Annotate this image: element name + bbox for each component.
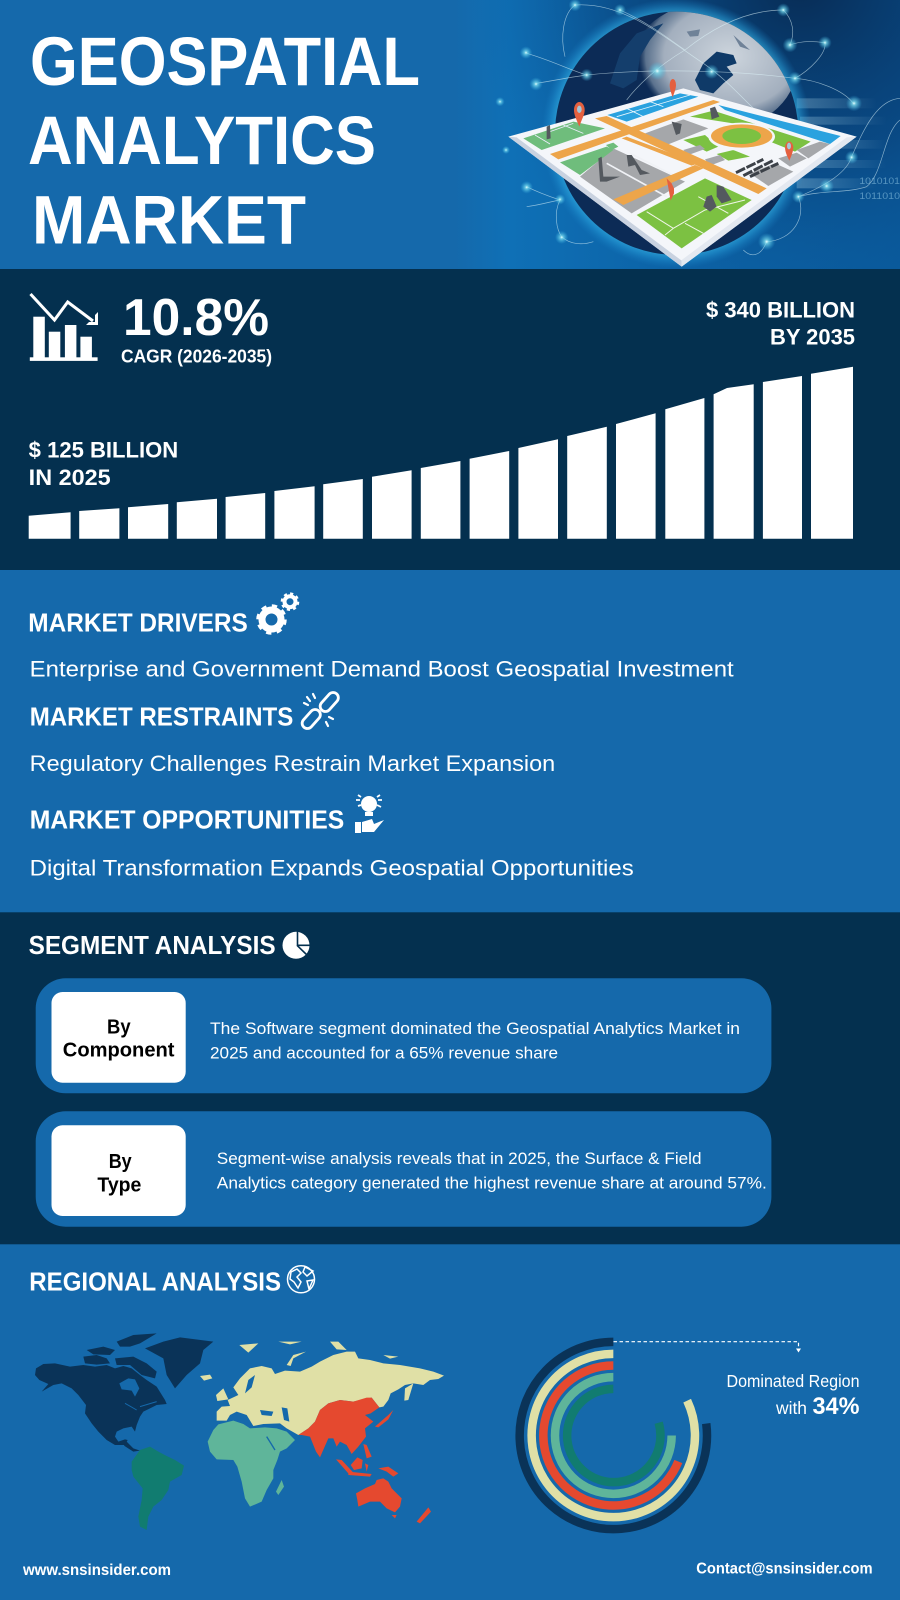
donut chart bbox=[520, 1342, 707, 1529]
text: component finding: 2025 and accounted for a 65% revenue share bbox=[210, 1043, 558, 1062]
heading: segment analysis: SEGMENT ANALYSIS bbox=[29, 930, 276, 960]
text: type finding bbox=[217, 1149, 767, 1192]
title bbox=[28, 23, 420, 258]
card: by type bbox=[36, 1111, 771, 1227]
text: restraint: Regulatory Challenges Restrain Market Expansion bbox=[30, 751, 555, 776]
footer: contact: Contact@snsinsider.com bbox=[696, 1560, 873, 1577]
callout: dominated region: with bbox=[775, 1398, 807, 1418]
label: by component: Component bbox=[63, 1040, 175, 1062]
callout: dominated region bbox=[726, 1371, 860, 1420]
text: component finding bbox=[210, 1019, 740, 1062]
2025 value bbox=[29, 438, 178, 490]
panel: market size stats bbox=[0, 269, 900, 570]
icon: globe bbox=[288, 1266, 314, 1293]
2035 value: BY 2035 bbox=[770, 325, 855, 350]
arrow: dashed leader bbox=[614, 1342, 801, 1352]
icon: idea in hand bbox=[355, 795, 384, 833]
world map bbox=[35, 1333, 444, 1530]
label: by type: Type bbox=[97, 1175, 141, 1197]
2035 value: $ 340 BILLION bbox=[706, 298, 855, 323]
bar chart bbox=[29, 367, 853, 539]
label: by component: By bbox=[107, 1016, 131, 1038]
heading: market drivers: MARKET DRIVERS bbox=[28, 608, 248, 638]
text: opportunity: Digital Transformation Expands Geospatial Opportunities bbox=[30, 856, 634, 881]
callout: dominated region: Dominated Region bbox=[726, 1371, 860, 1391]
card: by component bbox=[36, 978, 771, 1093]
region: South America bbox=[132, 1447, 184, 1530]
CAGR value: 10.8% bbox=[123, 289, 269, 347]
title: MARKET bbox=[32, 182, 306, 258]
binary digits: 1011010 bbox=[859, 191, 900, 201]
CAGR label: CAGR (2026-2035) bbox=[121, 347, 272, 367]
header hero illustration bbox=[455, 0, 900, 270]
title: GEOSPATIAL bbox=[30, 23, 420, 100]
text: component finding: The Software segment dominated the Geospatial Analytics Market in bbox=[210, 1019, 740, 1038]
icon: broken link bbox=[300, 690, 341, 731]
region: Asia Pacific bbox=[298, 1398, 431, 1523]
footer: website: www.snsinsider.com bbox=[22, 1562, 171, 1579]
text: type finding: Analytics category generated the highest revenue share at around 57%. bbox=[217, 1173, 767, 1192]
icon: CAGR chart bbox=[30, 294, 98, 361]
heading: market restraints: MARKET RESTRAINTS bbox=[30, 701, 293, 731]
heading: regional analysis: REGIONAL ANALYSIS bbox=[29, 1267, 281, 1297]
map sheet bbox=[508, 79, 857, 267]
binary digits bbox=[859, 176, 900, 201]
panel: market dynamics bbox=[28, 594, 734, 881]
map pins bbox=[574, 79, 793, 201]
callout: dominated region: 34% bbox=[812, 1393, 860, 1420]
text: driver: Enterprise and Government Demand Boost Geospatial Investment bbox=[30, 657, 734, 682]
machinery icons bbox=[547, 107, 732, 212]
2025 value: $ 125 BILLION bbox=[29, 438, 178, 463]
binary digits: 1010101 bbox=[859, 176, 900, 186]
panel: header bbox=[0, 0, 900, 270]
label: by type: By bbox=[109, 1151, 132, 1173]
heading: market opportunities: MARKET OPPORTUNITIES bbox=[30, 805, 344, 835]
icon: gears bbox=[258, 594, 298, 632]
panel: regional analysis bbox=[29, 1266, 860, 1530]
text: type finding: Segment-wise analysis reveals that in 2025, the Surface & Field bbox=[217, 1149, 702, 1168]
panel: segment analysis bbox=[0, 912, 900, 1244]
2035 value bbox=[706, 298, 855, 350]
2025 value: IN 2025 bbox=[29, 465, 111, 490]
region: North America bbox=[35, 1333, 213, 1452]
icon: pie chart bbox=[282, 931, 311, 959]
label: by type bbox=[52, 1125, 186, 1216]
title: ANALYTICS bbox=[28, 102, 376, 179]
label: by component bbox=[52, 992, 186, 1083]
region: Europe and Russia bbox=[200, 1342, 444, 1435]
region: Middle East and Africa bbox=[208, 1421, 295, 1507]
